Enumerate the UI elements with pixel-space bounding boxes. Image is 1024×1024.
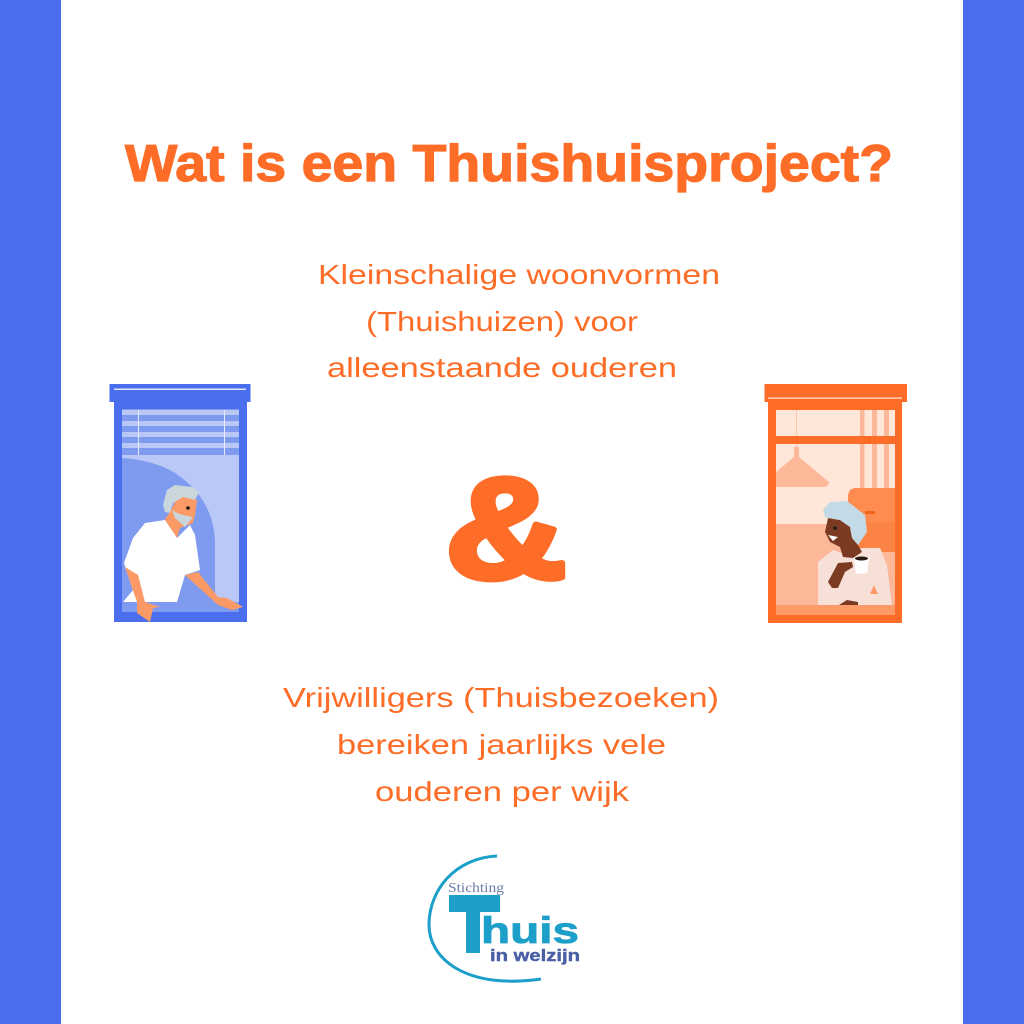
text block: woonvormen: (Thuishuizen) voor: [366, 306, 638, 337]
man: beard: [172, 510, 193, 527]
logo: Stichting Thuis in welzijn: Stichting: [448, 880, 504, 895]
logo: Stichting Thuis in welzijn: huis: [481, 910, 579, 951]
title: Wat is een Thuishuisproject?: [125, 135, 893, 193]
icon: blue window with man: [110, 384, 250, 622]
woman: lamp: [776, 447, 829, 487]
icon: orange window with woman: [764, 384, 907, 623]
text block: woonvormen: alleenstaande ouderen: [327, 352, 677, 383]
woman: hand: [828, 562, 853, 588]
woman: face: [825, 518, 862, 558]
left side bar: [0, 0, 61, 1024]
man: right arm: [185, 572, 243, 610]
woman: hair: [823, 501, 867, 545]
text block: vrijwilligers: [283, 682, 719, 807]
text block: vrijwilligers: Vrijwilligers (Thuisbezoeken): [283, 682, 719, 713]
logo: Stichting Thuis in welzijn: in welzijn: [490, 946, 580, 965]
logo: Stichting Thuis in welzijn: [429, 856, 580, 981]
right side bar: [963, 0, 1024, 1024]
ampersand: &: [445, 448, 567, 609]
man: neck and face: [163, 495, 197, 538]
man: left arm: [125, 567, 160, 622]
text block: vrijwilligers: bereiken jaarlijks vele: [337, 729, 666, 760]
text block: vrijwilligers: ouderen per wijk: [375, 776, 630, 807]
text block: woonvormen: [318, 259, 720, 383]
man: shirt: [123, 520, 200, 602]
man: hair: [163, 485, 199, 513]
text block: woonvormen: Kleinschalige woonvormen: [318, 259, 720, 290]
woman: cup: [854, 558, 869, 574]
woman: torso: [818, 548, 892, 605]
